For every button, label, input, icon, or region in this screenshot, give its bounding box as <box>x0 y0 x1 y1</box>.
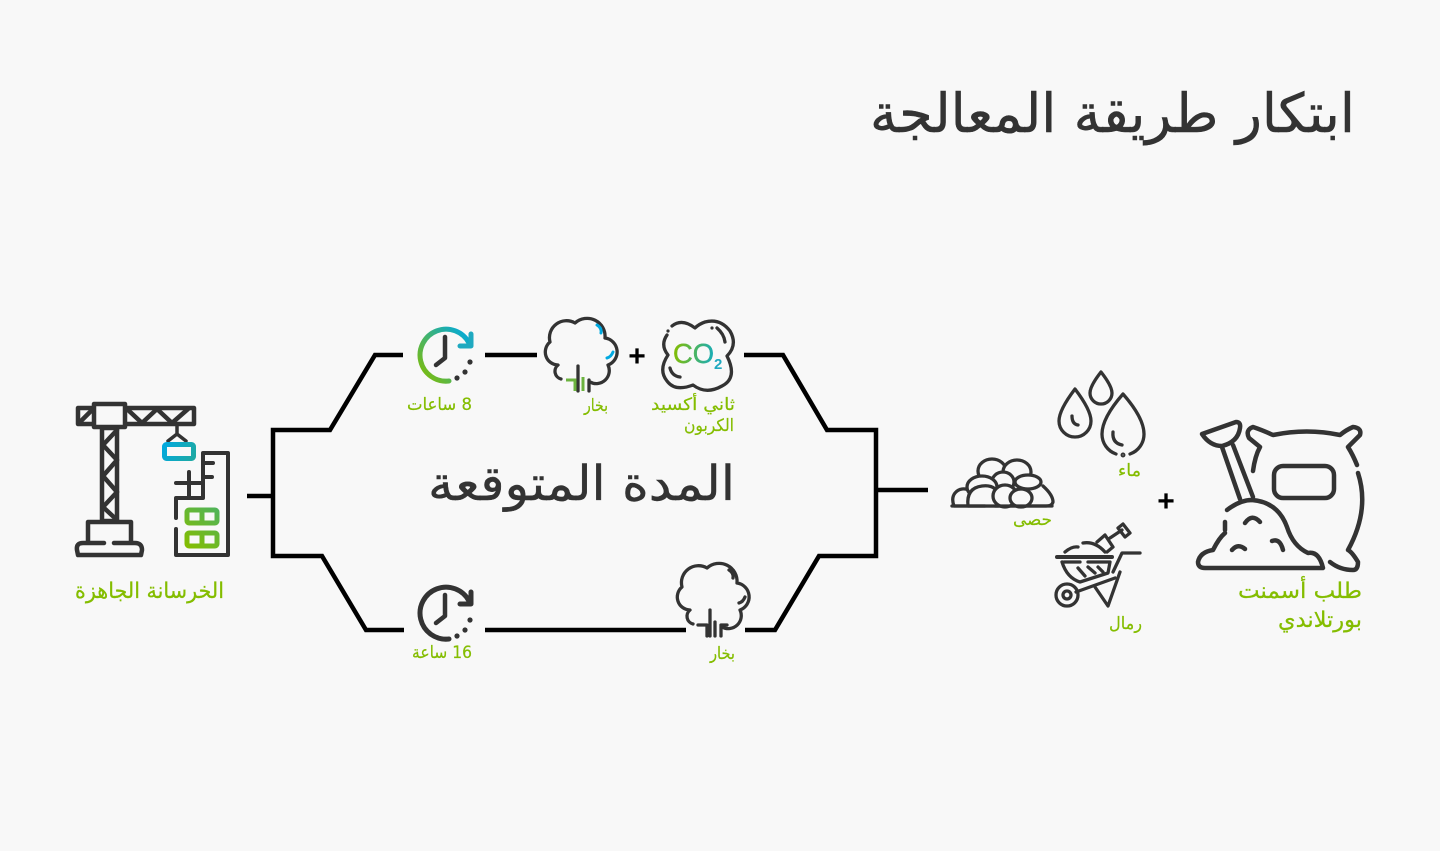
label: 16 hours: 16 ساعة <box>412 643 472 663</box>
icon: water drops <box>1059 372 1144 456</box>
icon: clock 16 hours <box>420 587 473 639</box>
icon: CO2 cloud: 2 <box>714 356 722 373</box>
icon: clock 8 hours <box>420 329 473 381</box>
plus top: + <box>628 340 646 373</box>
icon: wheelbarrow <box>1056 524 1140 606</box>
icon: gravel <box>952 459 1053 507</box>
plus right: + <box>1157 485 1175 518</box>
label: ready-mix concrete: الخرسانة الجاهزة <box>75 579 224 604</box>
text: بورتلاندي <box>1278 608 1362 633</box>
icon: CO2 cloud: CO <box>673 338 714 369</box>
text: الكربون <box>684 416 734 436</box>
label: Portland cement bag: طلب أسمنت <box>1238 576 1362 604</box>
icon: steam bottom <box>677 563 749 636</box>
label: 8 hours: 8 ساعات <box>407 395 472 415</box>
icon: cement bag with shovel <box>1198 422 1362 570</box>
center heading: expected duration: المدة المتوقعة <box>428 456 735 512</box>
icon: crane and building <box>77 404 228 555</box>
label: carbon dioxide: ثاني أكسيد <box>651 393 735 415</box>
label: sand: رمال <box>1109 614 1142 634</box>
label: water: ماء <box>1118 461 1141 481</box>
title: ابتكار طريقة المعالجة <box>870 82 1355 145</box>
icon: CO2 cloud <box>663 321 733 390</box>
connector: process lines <box>247 355 928 630</box>
label: steam bottom: بخار <box>709 644 735 664</box>
label: steam top: بخار <box>583 396 608 416</box>
label: gravel: حصى <box>1013 510 1052 530</box>
icon: steam top <box>545 318 617 391</box>
